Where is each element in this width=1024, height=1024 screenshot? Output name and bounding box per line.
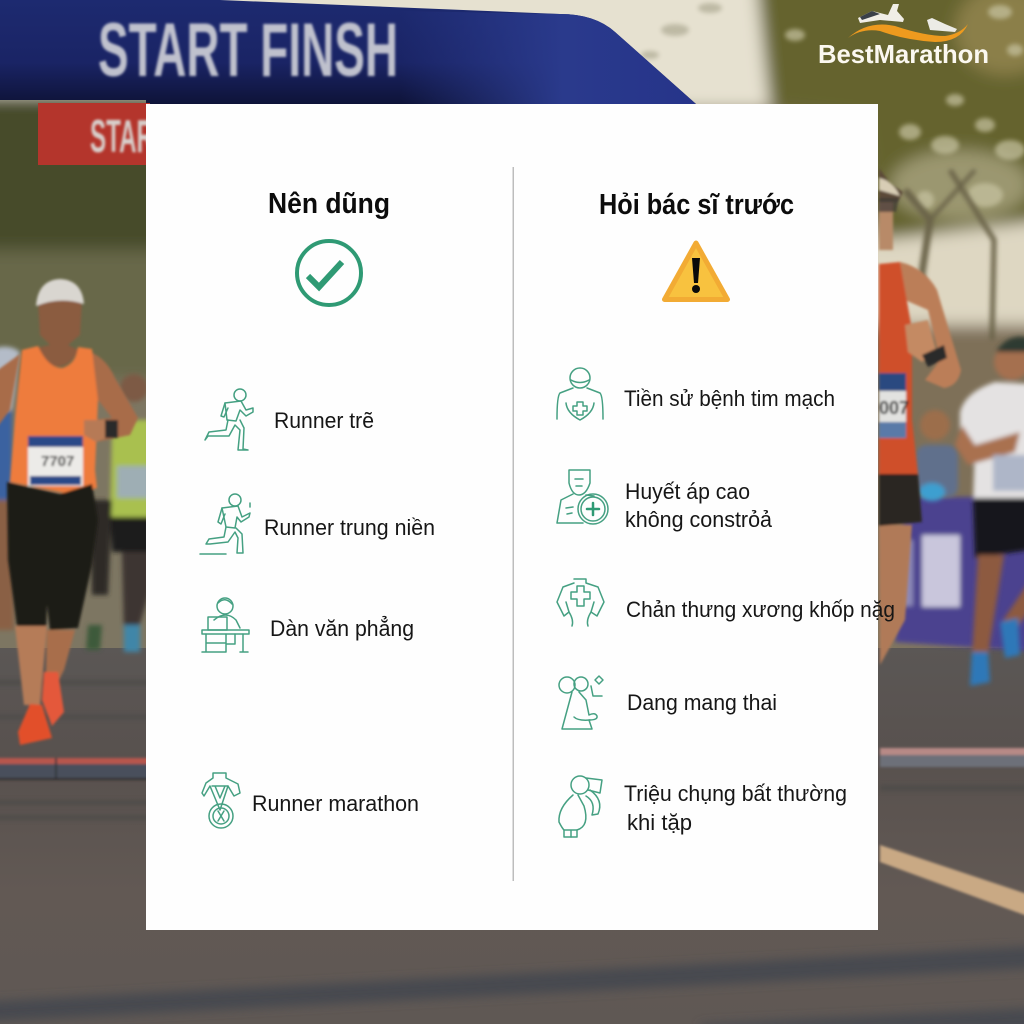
icon: warning triangle — [664, 243, 728, 300]
road: bands — [0, 680, 1024, 820]
icon: person with shield cross — [557, 368, 603, 420]
logo: wordmark: BestMarathon — [818, 39, 989, 69]
centre divider — [512, 167, 514, 881]
item: pregnant: Dang mang thai — [627, 690, 777, 715]
item: Dân văn phòng: Dàn văn phẳng — [270, 616, 414, 641]
right runner behind panel — [879, 168, 961, 665]
second runner, green vest — [0, 347, 150, 652]
item: uncontrolled high blood pressure — [557, 470, 773, 532]
background: tree trunks — [905, 170, 994, 340]
item: Runner trung niên — [200, 494, 435, 554]
road — [0, 648, 1024, 1024]
text: Huyết áp cao không constrỏả: Huyết áp cao — [625, 479, 750, 504]
red banner: STAR — [90, 110, 154, 162]
icon: pregnant person — [559, 676, 603, 729]
text: Huyết áp cao không constrỏả — [625, 479, 773, 532]
road: timing strip — [0, 748, 1024, 917]
heading: Hỏi bác sĩ trước: Hỏi bác sĩ trước — [599, 189, 794, 221]
right runner behind panel: 007 — [879, 398, 909, 418]
left runner in orange vest: 7707 — [41, 453, 74, 470]
item: severe joint injury: Chản thưng xương khốp nặg — [626, 597, 895, 622]
text: Huyết áp cao không constrỏả: không constrỏả — [625, 507, 773, 532]
background: leaf bokeh — [785, 5, 1024, 209]
icon: young runner — [205, 389, 253, 450]
background: sky and trees — [0, 0, 1024, 670]
far right runner — [955, 337, 1024, 686]
text: Triệu chụng bất thường khi tặp — [624, 781, 847, 835]
arch — [0, 0, 696, 104]
text: Triệu chụng bất thường khi tặp: Triệu chụng bất thường — [624, 781, 847, 806]
left runner in orange vest — [0, 279, 138, 745]
icon: green check — [297, 241, 361, 305]
item: severe joint injury — [557, 579, 895, 626]
background: sky leaves — [641, 3, 722, 59]
item: Runner trung niên: Runner trung niền — [264, 515, 435, 540]
red banner — [38, 103, 154, 165]
heading: Nên dũng: Nên dũng — [268, 188, 390, 220]
item: Runner marathon: Runner marathon — [252, 791, 419, 816]
icon: medal — [202, 773, 240, 828]
item: abnormal symptoms during training — [559, 776, 847, 837]
logo: BestMarathon — [818, 4, 989, 69]
item: Dân văn phòng — [202, 598, 414, 652]
icon: office worker at desk — [202, 598, 249, 652]
white content panel — [146, 104, 878, 930]
item: Runner trẻ: Runner trẽ — [274, 408, 374, 433]
item: heart disease history — [557, 368, 835, 420]
item: Runner trẻ — [205, 389, 374, 450]
logo: orange swoosh — [848, 24, 968, 42]
item: heart disease history: Tiền sử bệnh tim mạch — [624, 386, 835, 411]
icon: middle-aged runner — [200, 494, 250, 554]
icon: figure with bag — [559, 776, 602, 837]
icon: man with plus badge — [557, 470, 608, 524]
road: shadow bands — [0, 946, 1024, 1024]
left column: should run — [200, 188, 435, 828]
logo: left shoe — [858, 4, 904, 23]
logo: right shoe — [927, 18, 957, 32]
spectators — [916, 410, 958, 501]
icon: torso with cross — [557, 579, 604, 626]
arch: START FINSH — [98, 8, 398, 93]
purple banner — [895, 497, 1024, 652]
item: Runner marathon — [202, 773, 419, 828]
item: pregnant — [559, 676, 777, 729]
right column: ask doctor first — [557, 189, 895, 837]
text: Triệu chụng bất thường khi tặp: khi tặp — [627, 810, 692, 835]
